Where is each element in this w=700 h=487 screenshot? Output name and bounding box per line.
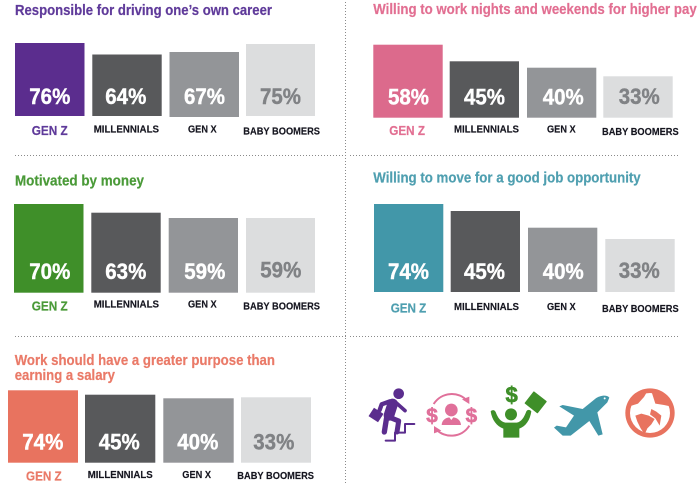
panel: nights and weekends: [373, 2, 697, 138]
bar: Gen Z 76%: GEN Z: [32, 124, 68, 138]
bar: Gen Z 70%: GEN Z: [32, 300, 68, 314]
bar: Gen Z 70%: [14, 204, 84, 314]
bar: Millennials 64%: MILLENNIALS: [94, 125, 159, 136]
bar: Gen X 40%: 40%: [543, 84, 584, 109]
icon: person between dollar signs with arrows: $: [426, 405, 438, 428]
bar: Baby Boomers 33%: BABY BOOMERS: [237, 471, 314, 482]
bar: Millennials 45%: MILLENNIALS: [88, 470, 153, 481]
bar: Gen Z 74%: [374, 204, 443, 316]
heading: earning a salary: [15, 368, 115, 384]
panel: greater purpose: [8, 353, 314, 484]
icon: person between dollar signs with arrows: $: [466, 405, 478, 428]
icon: person between dollar signs with arrows: [426, 394, 478, 436]
bar: Gen X 67%: [170, 52, 239, 136]
bar: Millennials 63%: 63%: [105, 259, 146, 284]
bar: Millennials 64%: 64%: [105, 84, 146, 109]
icon: cheering person with dollar and briefcase: [491, 383, 547, 438]
icon: cheering person with dollar and briefcase: $: [506, 383, 518, 408]
heading: Willing to move for a good job opportunity: [373, 170, 641, 186]
icon: globe: [625, 388, 675, 438]
bar: Baby Boomers 33%: 33%: [619, 258, 660, 283]
bar: Gen Z 70%: 70%: [29, 259, 70, 284]
bar: Gen X 59%: GEN X: [188, 300, 217, 311]
icon: airplane: [554, 396, 609, 436]
panel: responsible for own career: [15, 3, 320, 138]
bar: Millennials 63%: [91, 213, 161, 311]
bar: Baby Boomers 33%: BABY BOOMERS: [602, 304, 679, 315]
bar: Gen X 40%: [528, 228, 597, 313]
bar: Gen X 40%: GEN X: [547, 125, 576, 136]
bar: Gen X 40%: [163, 398, 234, 481]
bar: Gen Z 58%: GEN Z: [389, 124, 425, 138]
bar: Millennials 45%: [85, 395, 155, 481]
bar: Gen X 40%: GEN X: [182, 470, 211, 481]
bar: Gen Z 74%: GEN Z: [391, 302, 427, 316]
bar: Baby Boomers 59%: [243, 218, 320, 312]
bar: Gen Z 76%: 76%: [29, 84, 70, 109]
panel: move for a job: [373, 170, 679, 316]
bar: Gen X 67%: 67%: [184, 84, 225, 109]
bar: Gen Z 74%: [8, 390, 78, 484]
bar: Millennials 45%: 45%: [464, 84, 505, 109]
bar: Millennials 45%: 45%: [99, 429, 140, 454]
bar: Baby Boomers 75%: [243, 44, 320, 137]
bar: Baby Boomers 33%: 33%: [253, 429, 294, 454]
bar: Millennials 64%: [92, 54, 162, 136]
bar: Millennials 45%: MILLENNIALS: [454, 302, 519, 313]
bar: Millennials 45%: [450, 61, 519, 136]
bar: Gen Z 74%: 74%: [22, 429, 63, 454]
bar: Gen X 59%: [169, 218, 238, 311]
bar: Baby Boomers 59%: BABY BOOMERS: [243, 301, 320, 312]
bar: Baby Boomers 33%: 33%: [619, 84, 660, 109]
bar: Baby Boomers 33%: [602, 239, 679, 315]
heading: Motivated by money: [15, 174, 144, 190]
bar: Millennials 45%: MILLENNIALS: [454, 125, 519, 136]
icon: person climbing stairs with briefcase: [369, 388, 414, 441]
panel: motivated by money: [14, 174, 320, 314]
bar: Gen Z 76%: [15, 43, 84, 138]
bar: Gen X 67%: GEN X: [188, 125, 217, 136]
bar: Millennials 45%: [451, 211, 520, 313]
bar: Baby Boomers 33%: [237, 397, 314, 482]
bar: Gen X 40%: GEN X: [547, 302, 576, 313]
bar: Gen X 59%: 59%: [184, 259, 225, 284]
bar: Millennials 63%: MILLENNIALS: [94, 300, 159, 311]
heading: Responsible for driving one’s own career: [15, 3, 272, 19]
bar: Gen Z 58%: [373, 45, 443, 138]
bar: Baby Boomers 33%: BABY BOOMERS: [602, 127, 679, 138]
bar: Gen X 40%: [527, 68, 596, 136]
bar: Gen Z 74%: 74%: [388, 259, 429, 284]
bar: Baby Boomers 33%: [602, 76, 679, 138]
heading: Work should have a greater purpose than: [15, 353, 275, 369]
bar: Baby Boomers 75%: 75%: [260, 84, 301, 109]
bar: Gen X 40%: 40%: [177, 429, 218, 454]
bar: Gen Z 74%: GEN Z: [26, 470, 62, 484]
bar: Gen X 40%: 40%: [543, 259, 584, 284]
bar: Gen Z 58%: 58%: [388, 85, 429, 110]
bar: Baby Boomers 75%: BABY BOOMERS: [243, 126, 320, 137]
bar: Baby Boomers 59%: 59%: [260, 257, 301, 282]
bar: Millennials 45%: 45%: [464, 259, 505, 284]
